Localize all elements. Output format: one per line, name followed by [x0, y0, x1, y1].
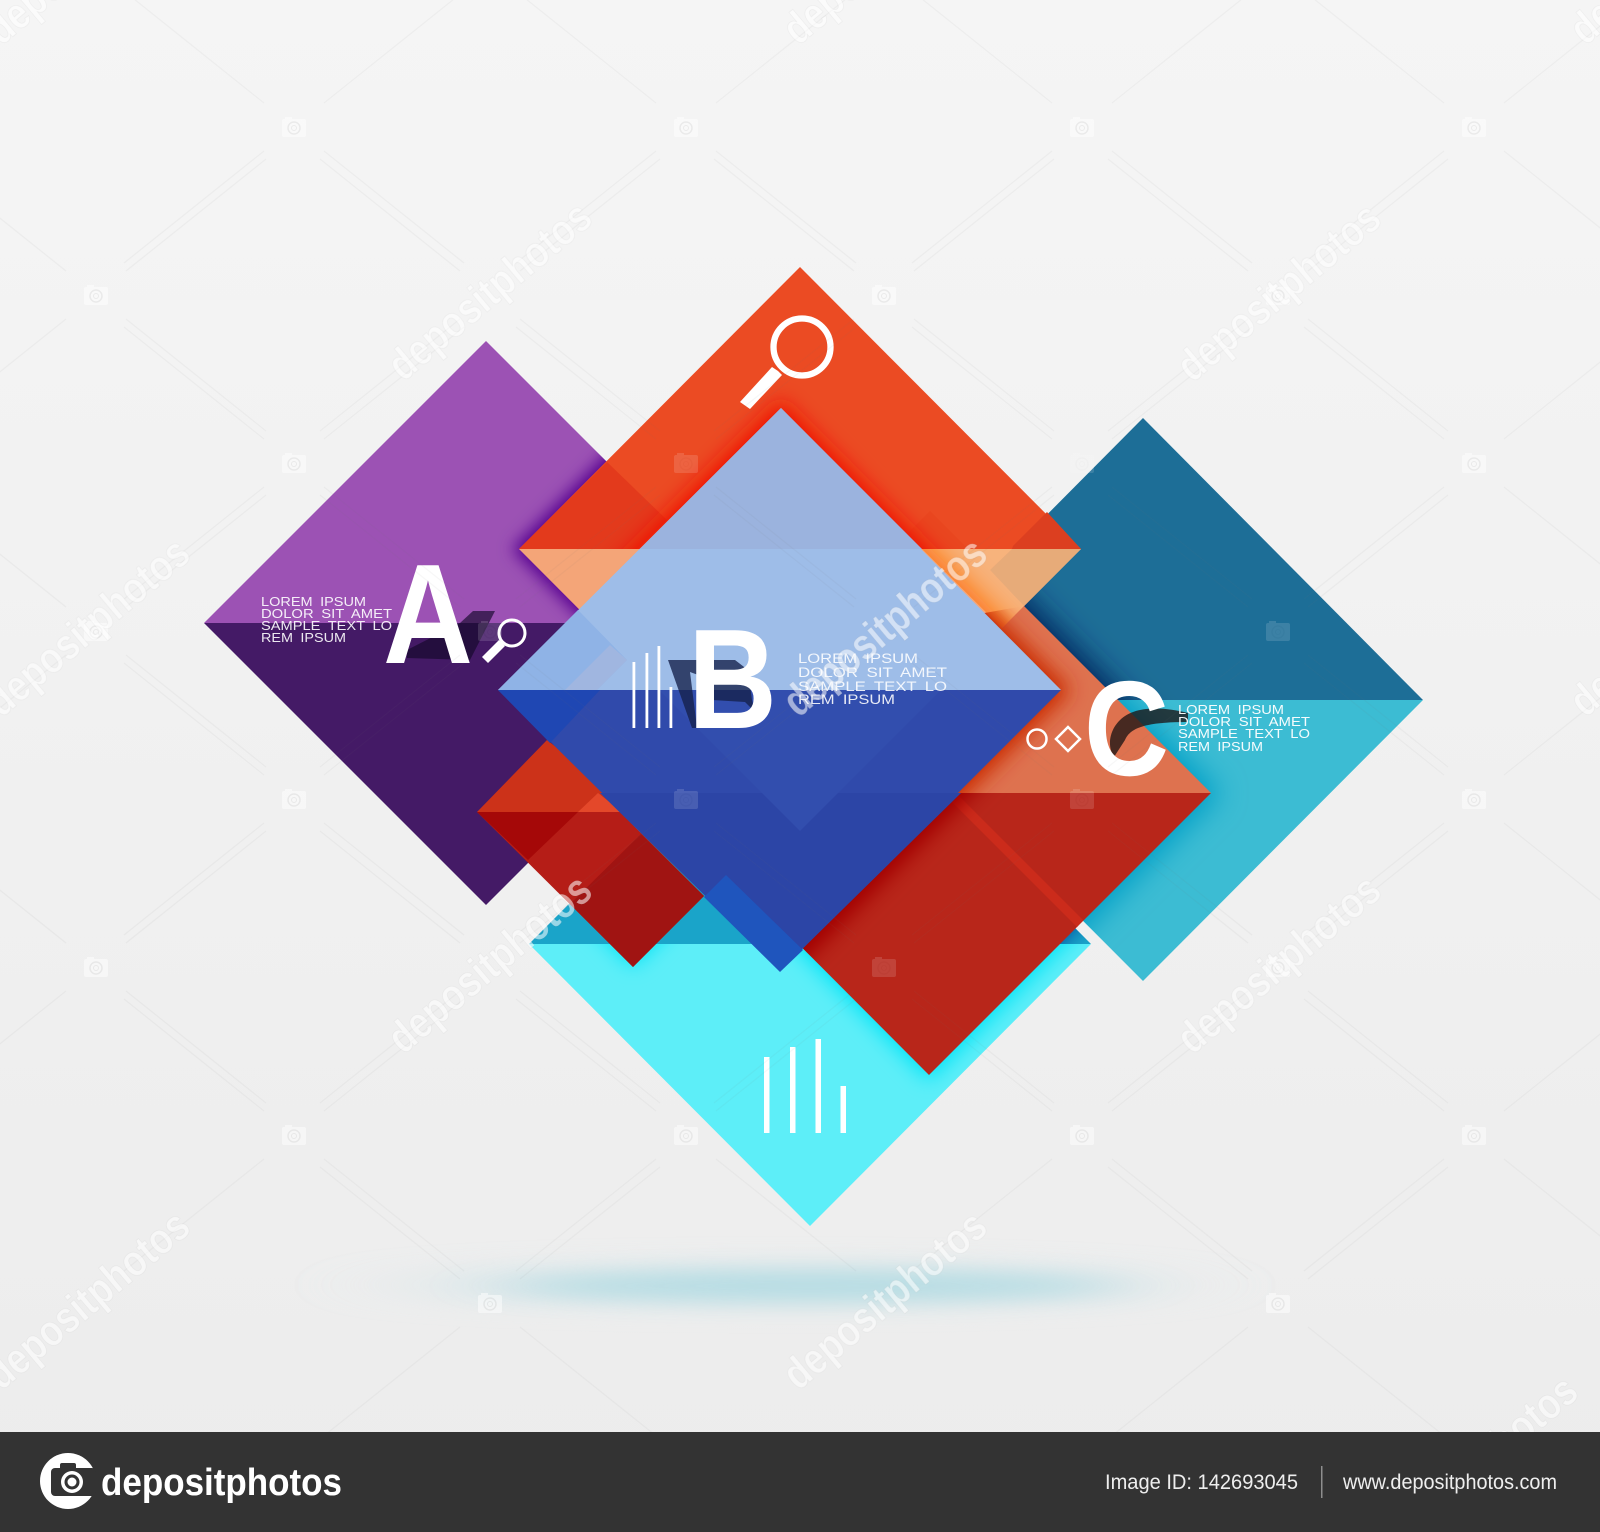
image id: Image ID: 142693045 — [1105, 1471, 1298, 1494]
shadows cast on teal and cyan — [477, 511, 1211, 1075]
watermarks: diagonal depositphotos text: depositphotos — [773, 1201, 996, 1399]
letter A block — [261, 535, 525, 694]
panel: purple left diamond — [204, 341, 768, 905]
letter B shadow — [668, 660, 755, 728]
watermarks: diagonal depositphotos text: depositphotos — [773, 528, 996, 726]
logo wordmark: depositphotos — [101, 1462, 342, 1504]
panel: blue centre diamond — [498, 408, 1061, 972]
letter A: A — [383, 535, 473, 694]
text block A: SAMPLE TEXT LO — [261, 619, 392, 633]
watermarks: camera marks on shapes — [478, 453, 1290, 977]
letter C: C — [1084, 653, 1169, 804]
text block A: REM IPSUM — [261, 631, 346, 645]
floor shadow — [385, 1267, 1185, 1303]
icon: camera logo — [40, 1453, 96, 1509]
text block C: LOREM IPSUM — [1178, 703, 1284, 717]
text block C: REM IPSUM — [1178, 740, 1263, 754]
watermarks: diagonal depositphotos text: depositphotos — [378, 192, 601, 390]
icon: diamond outline — [1056, 727, 1080, 751]
watermarks: camera marks on background — [84, 117, 1486, 1313]
text block A: LOREM IPSUM — [261, 595, 366, 609]
text block B: DOLOR SIT AMET — [798, 665, 947, 680]
text block B: LOREM IPSUM — [798, 651, 918, 666]
panel: red top diamond — [519, 267, 1081, 831]
shadows of blue diamond on red — [617, 394, 1079, 964]
text block B: SAMPLE TEXT LO — [798, 679, 947, 694]
text block C — [1178, 703, 1310, 754]
icon: thin bars — [632, 646, 672, 728]
letter B: B — [688, 600, 777, 759]
panel: left red piece — [477, 740, 704, 967]
letter C shadow — [1110, 708, 1188, 757]
website url: www.depositphotos.com — [1342, 1471, 1557, 1494]
letter B block — [632, 600, 947, 759]
shadow of red shapes on purple — [507, 451, 606, 619]
text block A — [261, 595, 392, 645]
panel: teal right diamond — [863, 418, 1423, 981]
text block C: SAMPLE TEXT LO — [1178, 727, 1310, 741]
bars icon — [764, 1039, 846, 1133]
text block C: DOLOR SIT AMET — [1178, 715, 1310, 729]
text block B: REM IPSUM — [798, 692, 895, 707]
watermarks: diagonal depositphotos text: depositphotos — [1167, 865, 1390, 1063]
icon: circle outline — [1028, 730, 1046, 748]
letter C block — [1028, 653, 1310, 804]
footer bar — [0, 1432, 1600, 1532]
icon: large magnifier — [740, 318, 830, 409]
text block A: DOLOR SIT AMET — [261, 607, 392, 621]
watermarks: diagonal depositphotos text: depositphotos — [378, 865, 601, 1063]
watermarks: diagonal depositphotos text: depositphotos — [1167, 193, 1390, 391]
icon: small magnifier — [482, 620, 525, 663]
text block B — [798, 651, 947, 707]
letter A shadow — [407, 611, 495, 660]
panel: large lower red diamond — [648, 549, 1211, 1075]
panel: cyan bottom diamond — [529, 662, 1091, 1226]
